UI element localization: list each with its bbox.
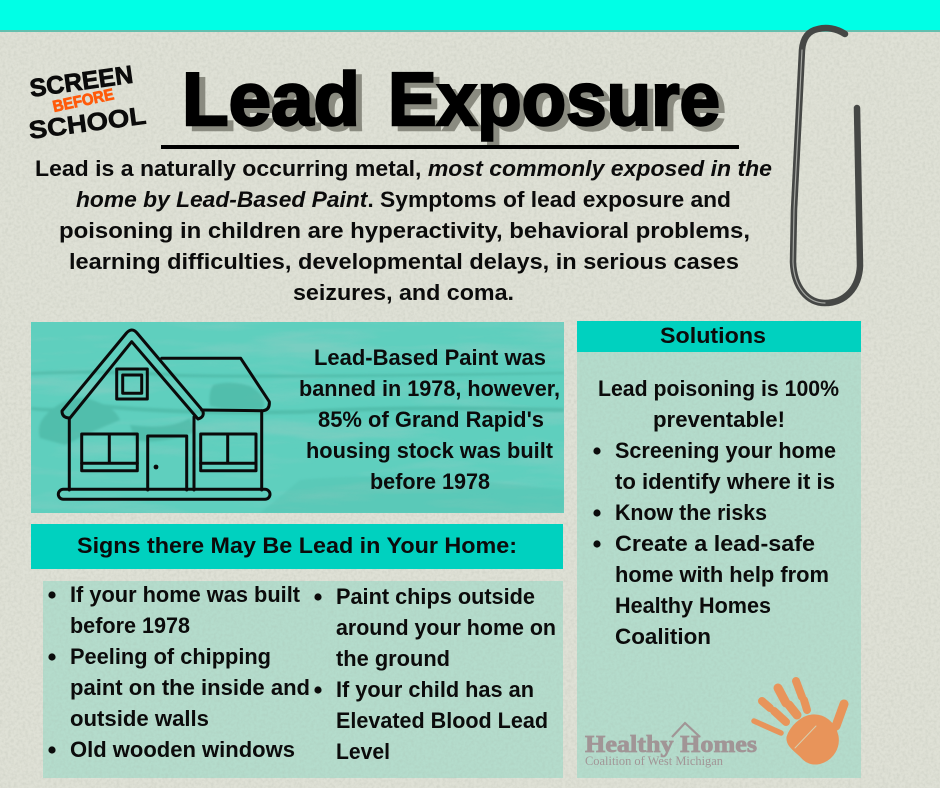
logo: Healthy Homes Coalition: Coalition of West Michigan — [585, 754, 724, 768]
signs list right column: the ground — [336, 646, 450, 671]
signs list right column: If your child has an — [336, 677, 534, 702]
title: Lead Exposure: Lead — [188, 62, 366, 146]
signs list left column — [48, 582, 310, 762]
solutions text: to identify where it is — [615, 469, 835, 494]
panel: house and lead paint fact — [31, 322, 564, 513]
top teal band — [0, 0, 940, 32]
solutions text — [593, 376, 839, 649]
signs list left column: before 1978 — [70, 613, 190, 638]
logo: Screen Before School — [27, 61, 148, 145]
panel: signs heading — [31, 524, 563, 569]
panel: solutions — [577, 321, 861, 778]
logo: Healthy Homes Coalition — [585, 723, 757, 768]
intro text block: poisoning in children are hyperactivity, behavioral problems, — [59, 218, 750, 243]
panel: signs heading: Signs there May Be Lead in Your Home: — [77, 533, 517, 558]
lead paint fact text: housing stock was built — [306, 438, 554, 463]
signs list right column: Paint chips outside — [336, 584, 535, 609]
panel: signs list — [43, 581, 563, 778]
signs list right column: Level — [336, 739, 390, 764]
icon: orange handprint — [754, 681, 844, 764]
intro text block: home by Lead-Based Paint . Symptoms of lead exposure and — [76, 187, 731, 212]
solutions text: Create a lead-safe — [615, 531, 815, 556]
signs list left column: outside walls — [70, 706, 209, 731]
solutions heading: Solutions — [660, 323, 766, 348]
intro text block — [35, 156, 772, 305]
signs list right column — [314, 584, 556, 764]
title: Lead Exposure: Exposure — [394, 62, 726, 146]
lead paint fact text: before 1978 — [370, 469, 490, 494]
logo: Screen Before School: BEFORE — [51, 86, 116, 116]
solutions text: home with help from — [615, 562, 829, 587]
signs list right column: around your home on — [336, 615, 556, 640]
solutions text: Healthy Homes — [615, 593, 771, 618]
logo: Healthy Homes Coalition: Healthy Homes — [585, 732, 757, 758]
signs list right column: Elevated Blood Lead — [336, 708, 548, 733]
title underline — [161, 145, 739, 149]
icon: house — [58, 330, 270, 499]
solutions text: Screening your home — [615, 438, 836, 463]
solutions text: Lead poisoning is 100% — [598, 376, 839, 401]
lead paint fact text: banned in 1978, however, — [299, 376, 560, 401]
solutions text: preventable! — [653, 407, 785, 432]
signs list left column: Peeling of chipping — [70, 644, 271, 669]
signs list left column: paint on the inside and — [70, 675, 310, 700]
title: Lead Exposure: Exposure — [388, 57, 720, 141]
paperclip — [793, 28, 860, 303]
title: Lead Exposure — [182, 57, 726, 146]
intro text block: seizures, and coma. — [293, 280, 514, 305]
solutions text: Know the risks — [615, 500, 767, 525]
intro text block: learning difficulties, developmental delays, in serious cases — [69, 249, 739, 274]
lead paint fact text: 85% of Grand Rapid's — [318, 407, 544, 432]
signs list left column: If your home was built — [70, 582, 301, 607]
solutions text: Coalition — [615, 624, 711, 649]
lead paint fact text — [299, 345, 560, 494]
logo: Screen Before School: SCREEN — [28, 61, 135, 103]
intro text block: Lead is a naturally occurring metal, most commonly exposed in the — [35, 156, 772, 181]
title: Lead Exposure: Lead — [182, 57, 360, 141]
lead paint fact text: Lead-Based Paint was — [314, 345, 546, 370]
logo: Screen Before School: SCHOOL — [27, 102, 148, 145]
signs list left column: Old wooden windows — [70, 737, 295, 762]
